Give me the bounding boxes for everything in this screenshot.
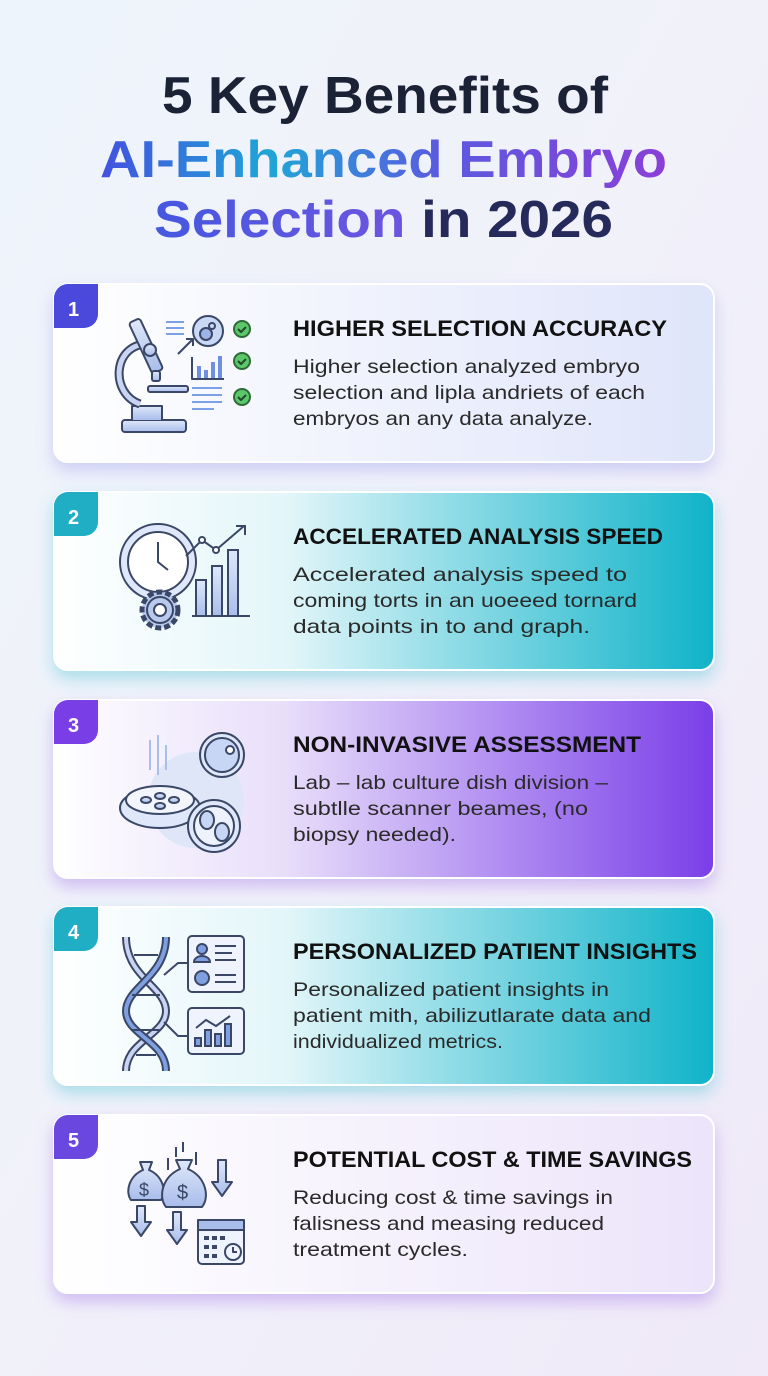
heading 1: HIGHER SELECTION ACCURACY <box>293 316 667 341</box>
icon: money bags, arrows and calendar <box>128 1142 244 1264</box>
text block 4: patient mith, abilizutlarate data and <box>293 1005 651 1027</box>
text block 4: individualized metrics. <box>293 1031 503 1053</box>
heading 4: PERSONALIZED PATIENT INSIGHTS <box>293 939 697 964</box>
icon: culture dish and embryos <box>120 733 244 852</box>
text block 4: Personalized patient insights in <box>293 979 609 1001</box>
text block 1: embryos an any data analyze. <box>293 408 593 430</box>
icon: microscope with data <box>119 316 250 432</box>
text block 3: Lab – lab culture dish division – <box>293 772 608 794</box>
text block 2: Accelerated analysis speed to <box>293 564 627 586</box>
title: AI-Enhanced Embryo <box>100 131 667 189</box>
text block 1: selection and lipla andriets of each <box>293 382 645 404</box>
title: Selection in 2026 <box>154 191 613 249</box>
heading 5: POTENTIAL COST & TIME SAVINGS <box>293 1147 692 1172</box>
icon: clock, gear and chart <box>120 524 250 628</box>
text block 3: subtlle scanner beames, (no <box>293 798 588 820</box>
badge 1: 1 <box>68 299 79 321</box>
badge 2: 2 <box>68 507 79 529</box>
badge 5: 5 <box>68 1130 79 1152</box>
panel: card 1 higher selection accuracy <box>54 284 714 462</box>
heading 2: ACCELERATED ANALYSIS SPEED <box>293 524 663 549</box>
panel: card 4 personalized patient insights <box>54 907 714 1085</box>
text block 4 <box>293 979 651 1053</box>
text block 2: data points in to and graph. <box>293 616 590 638</box>
title: 5 Key Benefits of <box>162 67 609 125</box>
text block 3 <box>293 772 608 846</box>
text block 2: coming torts in an uoeeed tornard <box>293 590 637 612</box>
text block 5 <box>293 1187 613 1261</box>
badge 2 <box>54 492 98 536</box>
badge 1 <box>54 284 98 328</box>
text block 2 <box>293 564 637 638</box>
icon: DNA with patient profile and chart <box>126 936 244 1071</box>
panel: card 3 non-invasive assessment <box>54 700 714 878</box>
text block 1 <box>293 356 645 430</box>
icon: money bags, arrows and calendar: $ <box>139 1180 149 1200</box>
text block 3: biopsy needed). <box>293 824 456 846</box>
title <box>100 67 667 249</box>
badge 4 <box>54 907 98 951</box>
badge 5 <box>54 1115 98 1159</box>
icon: money bags, arrows and calendar: $ <box>177 1182 188 1204</box>
text block 5: falisness and measing reduced <box>293 1213 604 1235</box>
heading 3: NON-INVASIVE ASSESSMENT <box>293 732 642 757</box>
text block 5: treatment cycles. <box>293 1239 468 1261</box>
badge 3: 3 <box>68 715 79 737</box>
text block 5: Reducing cost & time savings in <box>293 1187 613 1209</box>
panel: card 5 potential cost & time savings <box>54 1115 714 1293</box>
panel: card 2 accelerated analysis speed <box>54 492 714 670</box>
badge 4: 4 <box>68 922 80 944</box>
text block 1: Higher selection analyzed embryo <box>293 356 640 378</box>
badge 3 <box>54 700 98 744</box>
